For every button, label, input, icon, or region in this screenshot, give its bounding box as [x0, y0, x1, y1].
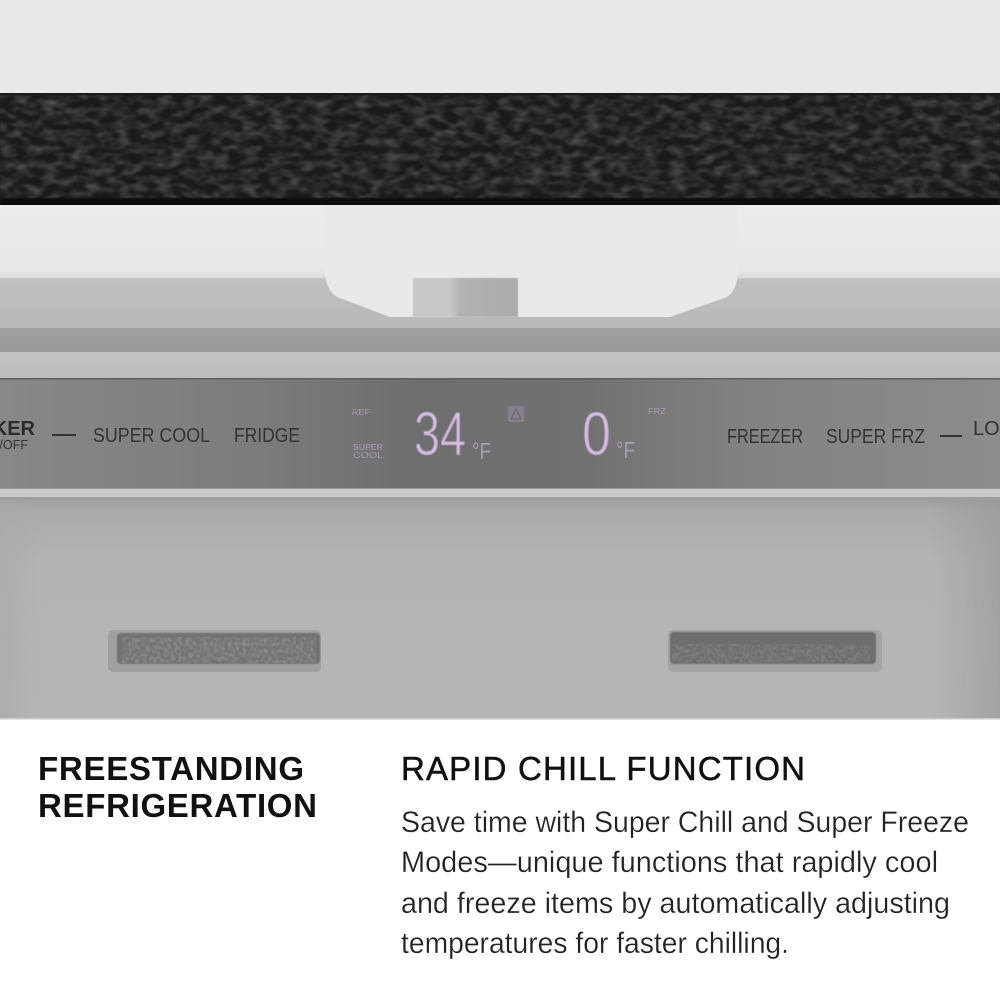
body text: Modes—unique functions that rapidly cool: [401, 846, 938, 879]
right control labels: LO: [973, 418, 1000, 440]
lip above control panel: [0, 352, 1000, 378]
fridge display: °F: [472, 438, 491, 464]
fridge display: COOL: [353, 450, 383, 460]
grey trim band: [0, 328, 1000, 352]
black textured door handle: [0, 93, 1000, 206]
freezer display: [582, 400, 666, 469]
heading: freestanding refrigeration: REFRIGERATION: [38, 787, 317, 824]
right control labels: [727, 418, 1000, 448]
left control labels: SUPER COOL: [93, 425, 210, 447]
fridge display: SUPER: [353, 442, 383, 452]
control panel: [0, 378, 1000, 489]
body text: and freeze items by automatically adjusting: [401, 887, 950, 920]
fridge display: [352, 400, 491, 469]
left vent: [108, 630, 321, 672]
heading: freestanding refrigeration: FREESTANDING: [38, 750, 304, 787]
right vent: [668, 630, 882, 672]
fridge display: 34: [414, 400, 466, 469]
white caption area: [0, 720, 1000, 1000]
freezer display: °F: [616, 437, 635, 463]
freezer display: 0: [582, 400, 611, 469]
heading: freestanding refrigeration: [38, 750, 317, 824]
freezer display: FRZ: [648, 406, 666, 416]
body text: [401, 806, 969, 960]
icon: warning triangle: [508, 406, 524, 422]
body text: temperatures for faster chilling.: [401, 927, 789, 960]
fridge display: REF: [352, 408, 370, 417]
white hinge tab: [325, 206, 738, 317]
left control labels: FRIDGE: [234, 425, 300, 447]
light strip under panel: [0, 488, 1000, 497]
left control labels: [0, 418, 300, 452]
heading: rapid chill function: RAPID CHILL FUNCTION: [401, 750, 805, 787]
right control labels: FREEZER: [727, 426, 803, 448]
lower drawer face: [0, 497, 1000, 720]
upper door surface: [0, 0, 1000, 94]
wall behind tab: [0, 205, 1000, 328]
right control labels: SUPER FRZ: [826, 426, 925, 448]
body text: Save time with Super Chill and Super Freeze: [401, 806, 969, 839]
